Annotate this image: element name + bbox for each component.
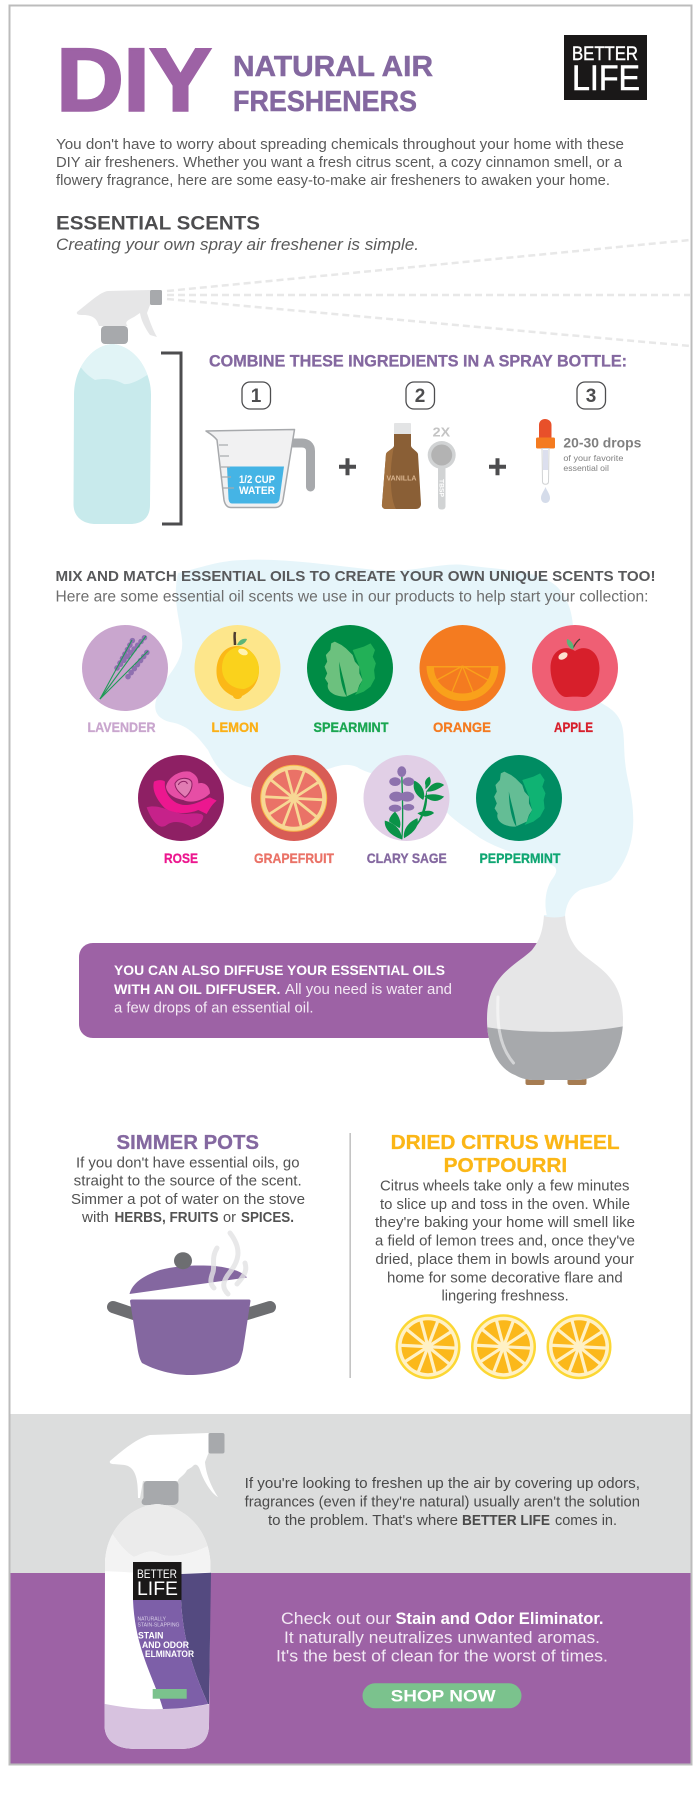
heading: simmer pots: SIMMER POTS xyxy=(116,1132,259,1154)
button: shop now: SHOP NOW xyxy=(391,1687,497,1706)
product bottle xyxy=(100,1433,224,1752)
dropper caption: 20-30 drops xyxy=(563,436,641,451)
diffuser body xyxy=(487,915,623,1080)
subheading: Creating your own spray air freshener is simple. xyxy=(56,236,419,254)
dried citrus text: lingering freshness. xyxy=(442,1288,569,1304)
label: apple: APPLE xyxy=(554,719,593,735)
purple band text: It naturally neutralizes unwanted aromas. xyxy=(284,1629,600,1647)
pot lid xyxy=(130,1265,247,1294)
heading: mix and match: MIX AND MATCH ESSENTIAL OILS TO CREATE YOUR OWN UNIQUE SCENTS TOO! xyxy=(56,569,656,585)
step number 2: 2 xyxy=(415,386,425,407)
callout: oil diffuser: WITH AN OIL DIFFUSER. xyxy=(114,981,280,997)
icon: citrus wheel 1 xyxy=(396,1314,460,1379)
step number 3 xyxy=(577,382,606,409)
label: grapefruit: GRAPEFRUIT xyxy=(254,850,334,866)
dropper caption xyxy=(563,436,641,473)
subheading: scents: Here are some essential oil scents we use in our products to help start your collection: xyxy=(56,589,648,606)
purple band text: Stain and Odor Eliminator. xyxy=(396,1610,604,1628)
dropper caption: of your favorite xyxy=(563,453,624,463)
icon: orange xyxy=(420,625,506,711)
simmer pots text: or xyxy=(223,1210,236,1226)
product label green tag xyxy=(153,1689,187,1699)
title: natural air fresheners xyxy=(233,51,433,118)
logo: Better Life xyxy=(564,35,647,100)
product nozzle xyxy=(208,1433,224,1454)
icon: spearmint xyxy=(307,625,393,711)
panel: purple band xyxy=(10,1573,691,1764)
spray bottle xyxy=(70,290,162,530)
icon: vanilla bottle: VANILLA xyxy=(386,474,417,483)
steam xyxy=(211,1233,246,1294)
product label text: NATURALLY xyxy=(138,1617,166,1623)
product label text: STAIN xyxy=(138,1631,164,1642)
icon: clary sage xyxy=(364,755,450,841)
product label purple band xyxy=(133,1600,208,1709)
logo: Better Life: BETTER xyxy=(572,44,638,65)
scent cloud xyxy=(155,560,633,916)
icon: peppermint xyxy=(476,755,562,841)
icon: rose xyxy=(138,755,224,841)
bottle sprayer head xyxy=(77,290,157,337)
simmer pots text: HERBS, FRUITS xyxy=(114,1210,219,1226)
product label logo: BETTER xyxy=(137,1569,177,1581)
gray band text: to the problem. That's where xyxy=(268,1513,458,1529)
callout: oil diffuser: a few drops of an essential oil. xyxy=(114,1001,314,1017)
heading: dried citrus wheel potpourri: POTPOURRI xyxy=(444,1155,567,1177)
simmer pots text: Simmer a pot of water on the stove xyxy=(71,1192,305,1208)
diffuser feet xyxy=(526,1076,586,1085)
bottle nozzle xyxy=(150,290,162,305)
intro paragraph: DIY air fresheners. Whether you want a fresh citrus scent, a cozy cinnamon smell, or a xyxy=(56,155,623,171)
dried citrus text: a field of lemon trees and, once they've xyxy=(375,1234,635,1250)
callout: oil diffuser: YOU CAN ALSO DIFFUSE YOUR ESSENTIAL OILS xyxy=(114,962,445,978)
product label text: STAIN-SLAPPING xyxy=(138,1622,180,1628)
label: lavender: LAVENDER xyxy=(88,719,156,735)
icon: measuring cup xyxy=(206,430,310,508)
gray band text xyxy=(245,1476,640,1529)
purple band text: Check out our xyxy=(281,1610,392,1628)
label: rose: ROSE xyxy=(164,850,198,866)
step number 1: 1 xyxy=(251,386,262,407)
icon: tablespoon: TBSP xyxy=(438,479,444,497)
dried citrus text xyxy=(375,1179,635,1304)
bracket xyxy=(161,353,181,524)
product label logo: LIFE xyxy=(137,1578,178,1600)
callout: oil diffuser xyxy=(79,943,545,1038)
step number 2 xyxy=(406,382,434,409)
gray band text: fragrances (even if they're natural) usually aren't the solution xyxy=(245,1495,640,1511)
dried citrus text: home for some decorative flare and xyxy=(387,1270,623,1286)
product label dark band xyxy=(181,1573,211,1704)
product label text: ELMINATOR xyxy=(145,1649,194,1660)
gray band text: comes in. xyxy=(555,1513,617,1529)
icon: dropper xyxy=(536,419,555,503)
icon: apple xyxy=(532,625,618,711)
label: clary sage: CLARY SAGE xyxy=(367,850,447,866)
bottle collar xyxy=(101,326,128,344)
step number 3: 3 xyxy=(586,386,596,407)
dried citrus text: they're baking your home will smell like xyxy=(375,1215,635,1231)
button: shop now xyxy=(362,1683,522,1708)
icon: citrus wheel 3 xyxy=(546,1314,612,1379)
plus sign xyxy=(339,458,356,475)
spray mist lines xyxy=(167,240,690,346)
product label text: AND ODOR xyxy=(142,1640,189,1651)
simmer pots text: with xyxy=(81,1210,109,1226)
heading: combine ingredients: COMBINE THESE INGREDIENTS IN A SPRAY BOTTLE: xyxy=(209,352,627,370)
divider xyxy=(350,1133,351,1378)
simmer pots text xyxy=(71,1156,305,1226)
dried citrus text: Citrus wheels take only a few minutes xyxy=(380,1179,630,1195)
label: spearmint: SPEARMINT xyxy=(314,719,389,735)
simmer pots text: straight to the source of the scent. xyxy=(74,1174,302,1190)
pot knob xyxy=(174,1252,192,1269)
dried citrus text: to slice up and toss in the oven. While xyxy=(380,1197,630,1213)
plus sign xyxy=(489,458,506,475)
heading: dried citrus wheel potpourri: DRIED CITRUS WHEEL xyxy=(391,1132,620,1154)
icon: tablespoon xyxy=(428,441,456,510)
icon: measuring cup: 1/2 CUP xyxy=(239,474,275,486)
simmer pots text: SPICES. xyxy=(241,1210,294,1226)
gray band text: If you're looking to freshen up the air by covering up odors, xyxy=(245,1476,640,1492)
step number 1 xyxy=(242,382,270,409)
intro paragraph xyxy=(56,137,624,189)
icon: simmer pot xyxy=(113,1233,270,1375)
title: natural air fresheners: FRESHENERS xyxy=(233,86,417,118)
panel: gray band xyxy=(10,1414,691,1573)
label: orange: ORANGE xyxy=(433,719,491,735)
pot handles xyxy=(113,1307,270,1314)
dropper caption: essential oil xyxy=(563,463,609,473)
icon: diffuser xyxy=(487,915,623,1085)
pot body xyxy=(130,1300,250,1375)
product collar xyxy=(142,1481,178,1505)
title: DIY: DIY xyxy=(56,30,212,130)
heading: essential scents: ESSENTIAL SCENTS xyxy=(56,212,260,234)
bottle body xyxy=(74,344,151,524)
purple band text: It's the best of clean for the worst of times. xyxy=(276,1648,608,1666)
product sprayer head xyxy=(110,1433,218,1498)
title: natural air fresheners: NATURAL AIR xyxy=(233,51,433,83)
product label logo xyxy=(133,1562,182,1600)
simmer pots text: If you don't have essential oils, go xyxy=(76,1156,300,1172)
product label text xyxy=(138,1617,194,1660)
icon: citrus wheel 2 xyxy=(471,1314,536,1379)
label: lemon: LEMON xyxy=(212,719,258,735)
label: 2X: 2X xyxy=(433,425,451,440)
gray band text: BETTER LIFE xyxy=(462,1513,550,1529)
label: peppermint: PEPPERMINT xyxy=(480,850,561,866)
icon: measuring cup: WATER xyxy=(239,485,275,497)
purple band text xyxy=(276,1610,608,1666)
intro paragraph: You don't have to worry about spreading chemicals throughout your home with these xyxy=(56,137,624,153)
callout: oil diffuser: All you need is water and xyxy=(285,982,452,998)
icon: lemon xyxy=(194,625,280,711)
icon: lavender xyxy=(82,625,168,711)
heading: dried citrus wheel potpourri xyxy=(391,1132,620,1177)
dried citrus text: dried, place them in bowls around your xyxy=(375,1252,634,1268)
intro paragraph: flowery fragrance, here are some easy-to-make air fresheners to awaken your home. xyxy=(56,173,610,189)
icon: grapefruit xyxy=(251,755,337,841)
icon: vanilla bottle xyxy=(382,423,421,509)
logo: Better Life: LIFE xyxy=(572,59,640,98)
product body xyxy=(104,1504,210,1749)
